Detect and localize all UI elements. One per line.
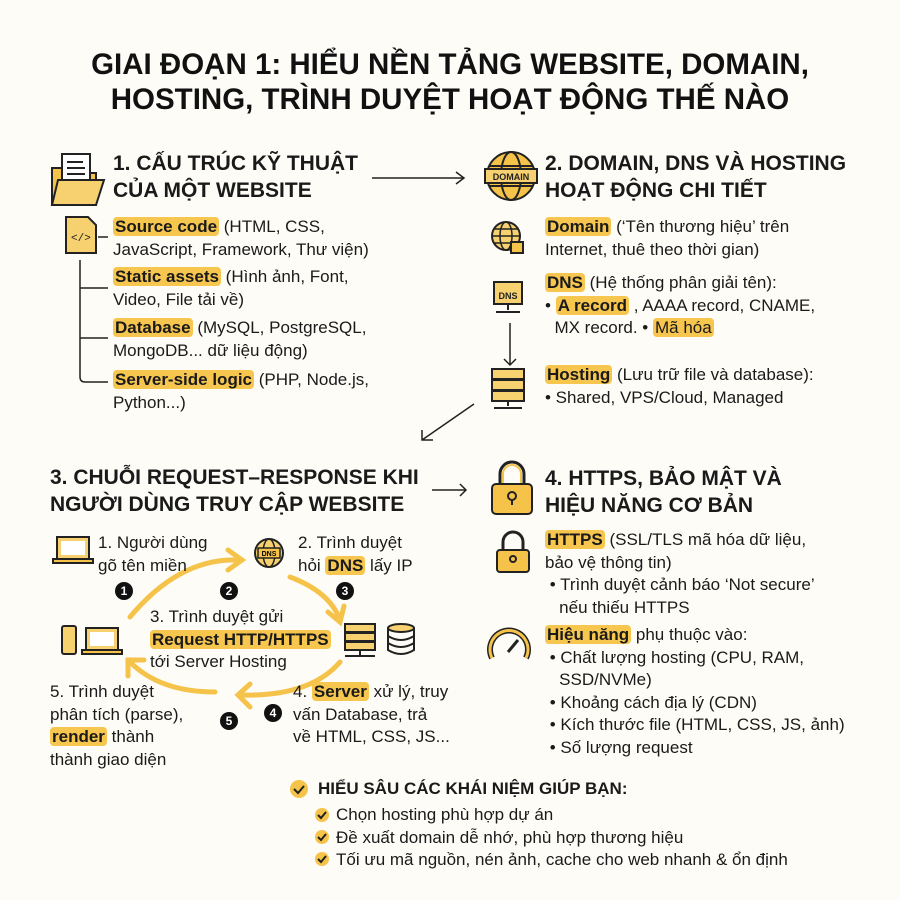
- text: performance: • Chất lượng hosting (CPU, RAM,: [550, 648, 804, 666]
- heading 3: 3. CHUỖI REQUEST–RESPONSE KHI: [50, 466, 419, 489]
- list: summary items: Tối ưu mã nguồn, nén ảnh, cache cho web nhanh & ổn định: [336, 850, 788, 869]
- text: step 4: về HTML, CSS, JS...: [293, 727, 450, 746]
- icon: dns globe: DNS: [262, 551, 277, 558]
- numbered circles: [115, 582, 354, 730]
- list: summary items: Chọn hosting phù hợp dự án: [336, 805, 553, 824]
- text: step 5: 5. Trình duyệt: [50, 682, 154, 701]
- numbered circles: 1: [121, 584, 127, 598]
- icon: code file: </>: [71, 233, 91, 245]
- icon: folder: [50, 153, 106, 206]
- icon: domain globe: DOMAIN: [493, 172, 529, 182]
- panel: section 2: [484, 151, 846, 409]
- title: [91, 48, 809, 116]
- text: step 5: render thành: [52, 727, 154, 746]
- text: domain: Domain (‘Tên thương hiệu’ trên: [547, 217, 789, 236]
- text: step 4: 4. Server xử lý, truy: [293, 682, 448, 701]
- icon: devices: [61, 625, 123, 655]
- icon: dns globe: [254, 538, 284, 568]
- text: https: [545, 529, 815, 619]
- text: step 5: [50, 682, 183, 768]
- text: step 3: Request HTTP/HTTPS: [152, 630, 329, 648]
- arrow: 3 to 4: [432, 484, 467, 496]
- icon: laptop: [52, 536, 94, 564]
- text: database: Database (MySQL, PostgreSQL,: [115, 318, 366, 337]
- text: step 4: vấn Database, trả: [293, 704, 427, 724]
- arrow: 2 to 3 diagonal: [421, 403, 474, 441]
- text: step 2: 2. Trình duyệt: [298, 533, 402, 552]
- text: static assets: Video, File tải về): [113, 290, 244, 308]
- text: https: • Trình duyệt cảnh báo ‘Not secure’: [550, 575, 815, 594]
- icon: code file: [65, 216, 97, 254]
- icon: dns: DNS: [498, 291, 518, 301]
- text: performance: Hiệu năng phụ thuộc vào:: [547, 625, 747, 644]
- panel: section 3: [50, 464, 450, 768]
- text: performance: • Khoảng cách địa lý (CDN): [550, 692, 757, 712]
- text: step 3: [150, 607, 331, 671]
- heading 1: [113, 150, 358, 202]
- diagram: flow arrows: [126, 548, 346, 710]
- arrow: 1 to 2: [372, 171, 466, 185]
- numbered circles: 5: [226, 714, 232, 728]
- text: https: bảo vệ thông tin): [545, 552, 672, 572]
- heading 2: 2. DOMAIN, DNS VÀ HOSTING: [545, 152, 846, 175]
- summary: bottom: [288, 778, 878, 873]
- text: performance: [545, 624, 845, 759]
- list: summary items: Đề xuất domain dễ nhớ, phù hợp thương hiệu: [336, 828, 683, 846]
- heading 2: HOẠT ĐỘNG CHI TIẾT: [545, 179, 767, 202]
- icon: server + db: [344, 623, 415, 657]
- icon: gauge: [486, 626, 532, 662]
- heading 3: [50, 464, 419, 516]
- icon: big lock: [491, 460, 533, 515]
- text: server-side: [113, 370, 369, 412]
- title: GIAI ĐOẠN 1: HIỂU NỀN TẢNG WEBSITE, DOMAIN,: [91, 48, 809, 81]
- text: step 1: gõ tên miền: [98, 556, 187, 574]
- text: database: [113, 318, 366, 360]
- text: static assets: [113, 267, 349, 308]
- icon: domain globe: [484, 151, 538, 201]
- numbered circles: 4: [270, 706, 276, 720]
- text: server-side: Python...): [113, 392, 186, 412]
- heading: summary: HIỂU SÂU CÁC KHÁI NIỆM GIÚP BẠN:: [318, 779, 627, 798]
- arrow: dns down: [504, 323, 516, 366]
- text: hosting: [545, 365, 814, 406]
- heading 3: NGƯỜI DÙNG TRUY CẬP WEBSITE: [50, 493, 404, 516]
- text: step 2: [298, 533, 413, 575]
- heading 1: CỦA MỘT WEBSITE: [113, 179, 312, 202]
- text: step 3: tới Server Hosting: [150, 652, 287, 671]
- text: source code: JavaScript, Framework, Thư viện): [113, 240, 369, 258]
- heading 1: 1. CẤU TRÚC KỸ THUẬT: [113, 152, 358, 175]
- text: server-side: Server-side logic (PHP, Node.js,: [115, 370, 369, 389]
- numbered circles: 2: [226, 584, 232, 598]
- text: dns: [545, 273, 815, 337]
- text: step 1: 1. Người dùng: [98, 533, 207, 552]
- list: summary items: [336, 804, 788, 872]
- text: step 5: thành giao diện: [50, 750, 166, 768]
- text: static assets: Static assets (Hình ảnh, Font,: [115, 267, 349, 286]
- text: https: HTTPS (SSL/TLS mã hóa dữ liệu,: [547, 530, 806, 549]
- text: domain: [545, 217, 789, 258]
- heading 2: [545, 151, 846, 202]
- text: step 4: [293, 682, 450, 746]
- heading 4: [545, 466, 782, 517]
- text: database: MongoDB... dữ liệu động): [113, 340, 308, 360]
- heading 4: HIỆU NĂNG CƠ BẢN: [545, 494, 753, 517]
- heading 4: 4. HTTPS, BẢO MẬT VÀ: [545, 467, 782, 490]
- text: domain: Internet, thuê theo thời gian): [545, 240, 759, 258]
- text: hosting: • Shared, VPS/Cloud, Managed: [545, 388, 783, 406]
- text: https: nếu thiếu HTTPS: [559, 598, 690, 616]
- text: hosting: Hosting (Lưu trữ file và database):: [547, 365, 814, 384]
- panel: section 4: [487, 460, 845, 756]
- icon: dns: [493, 281, 523, 313]
- icons: checks: [288, 778, 318, 873]
- text: performance: • Kích thước file (HTML, CSS, JS, ảnh): [550, 715, 845, 734]
- numbered circles: 3: [342, 584, 348, 598]
- text: step 3: 3. Trình duyệt gửi: [150, 607, 283, 626]
- tree lines: [79, 236, 108, 383]
- icon: globe lock: [491, 221, 524, 254]
- text: dns: MX record. • Mã hóa: [554, 318, 712, 337]
- text: source code: [113, 217, 369, 258]
- icon: server: [491, 368, 525, 409]
- text: source code: Source code (HTML, CSS,: [115, 217, 325, 236]
- text: step 1: [98, 533, 207, 574]
- text: step 5: phân tích (parse),: [50, 704, 183, 724]
- title: HOSTING, TRÌNH DUYỆT HOẠT ĐỘNG THẾ NÀO: [111, 83, 789, 116]
- text: performance: • Số lượng request: [550, 738, 693, 756]
- panel: section 1: [50, 150, 369, 412]
- icon: small lock: [496, 530, 530, 573]
- text: dns: • A record , AAAA record, CNAME,: [545, 296, 815, 314]
- text: dns: DNS (Hệ thống phân giải tên):: [547, 273, 777, 292]
- text: step 2: hỏi DNS lấy IP: [298, 556, 413, 574]
- text: performance: SSD/NVMe): [559, 670, 652, 689]
